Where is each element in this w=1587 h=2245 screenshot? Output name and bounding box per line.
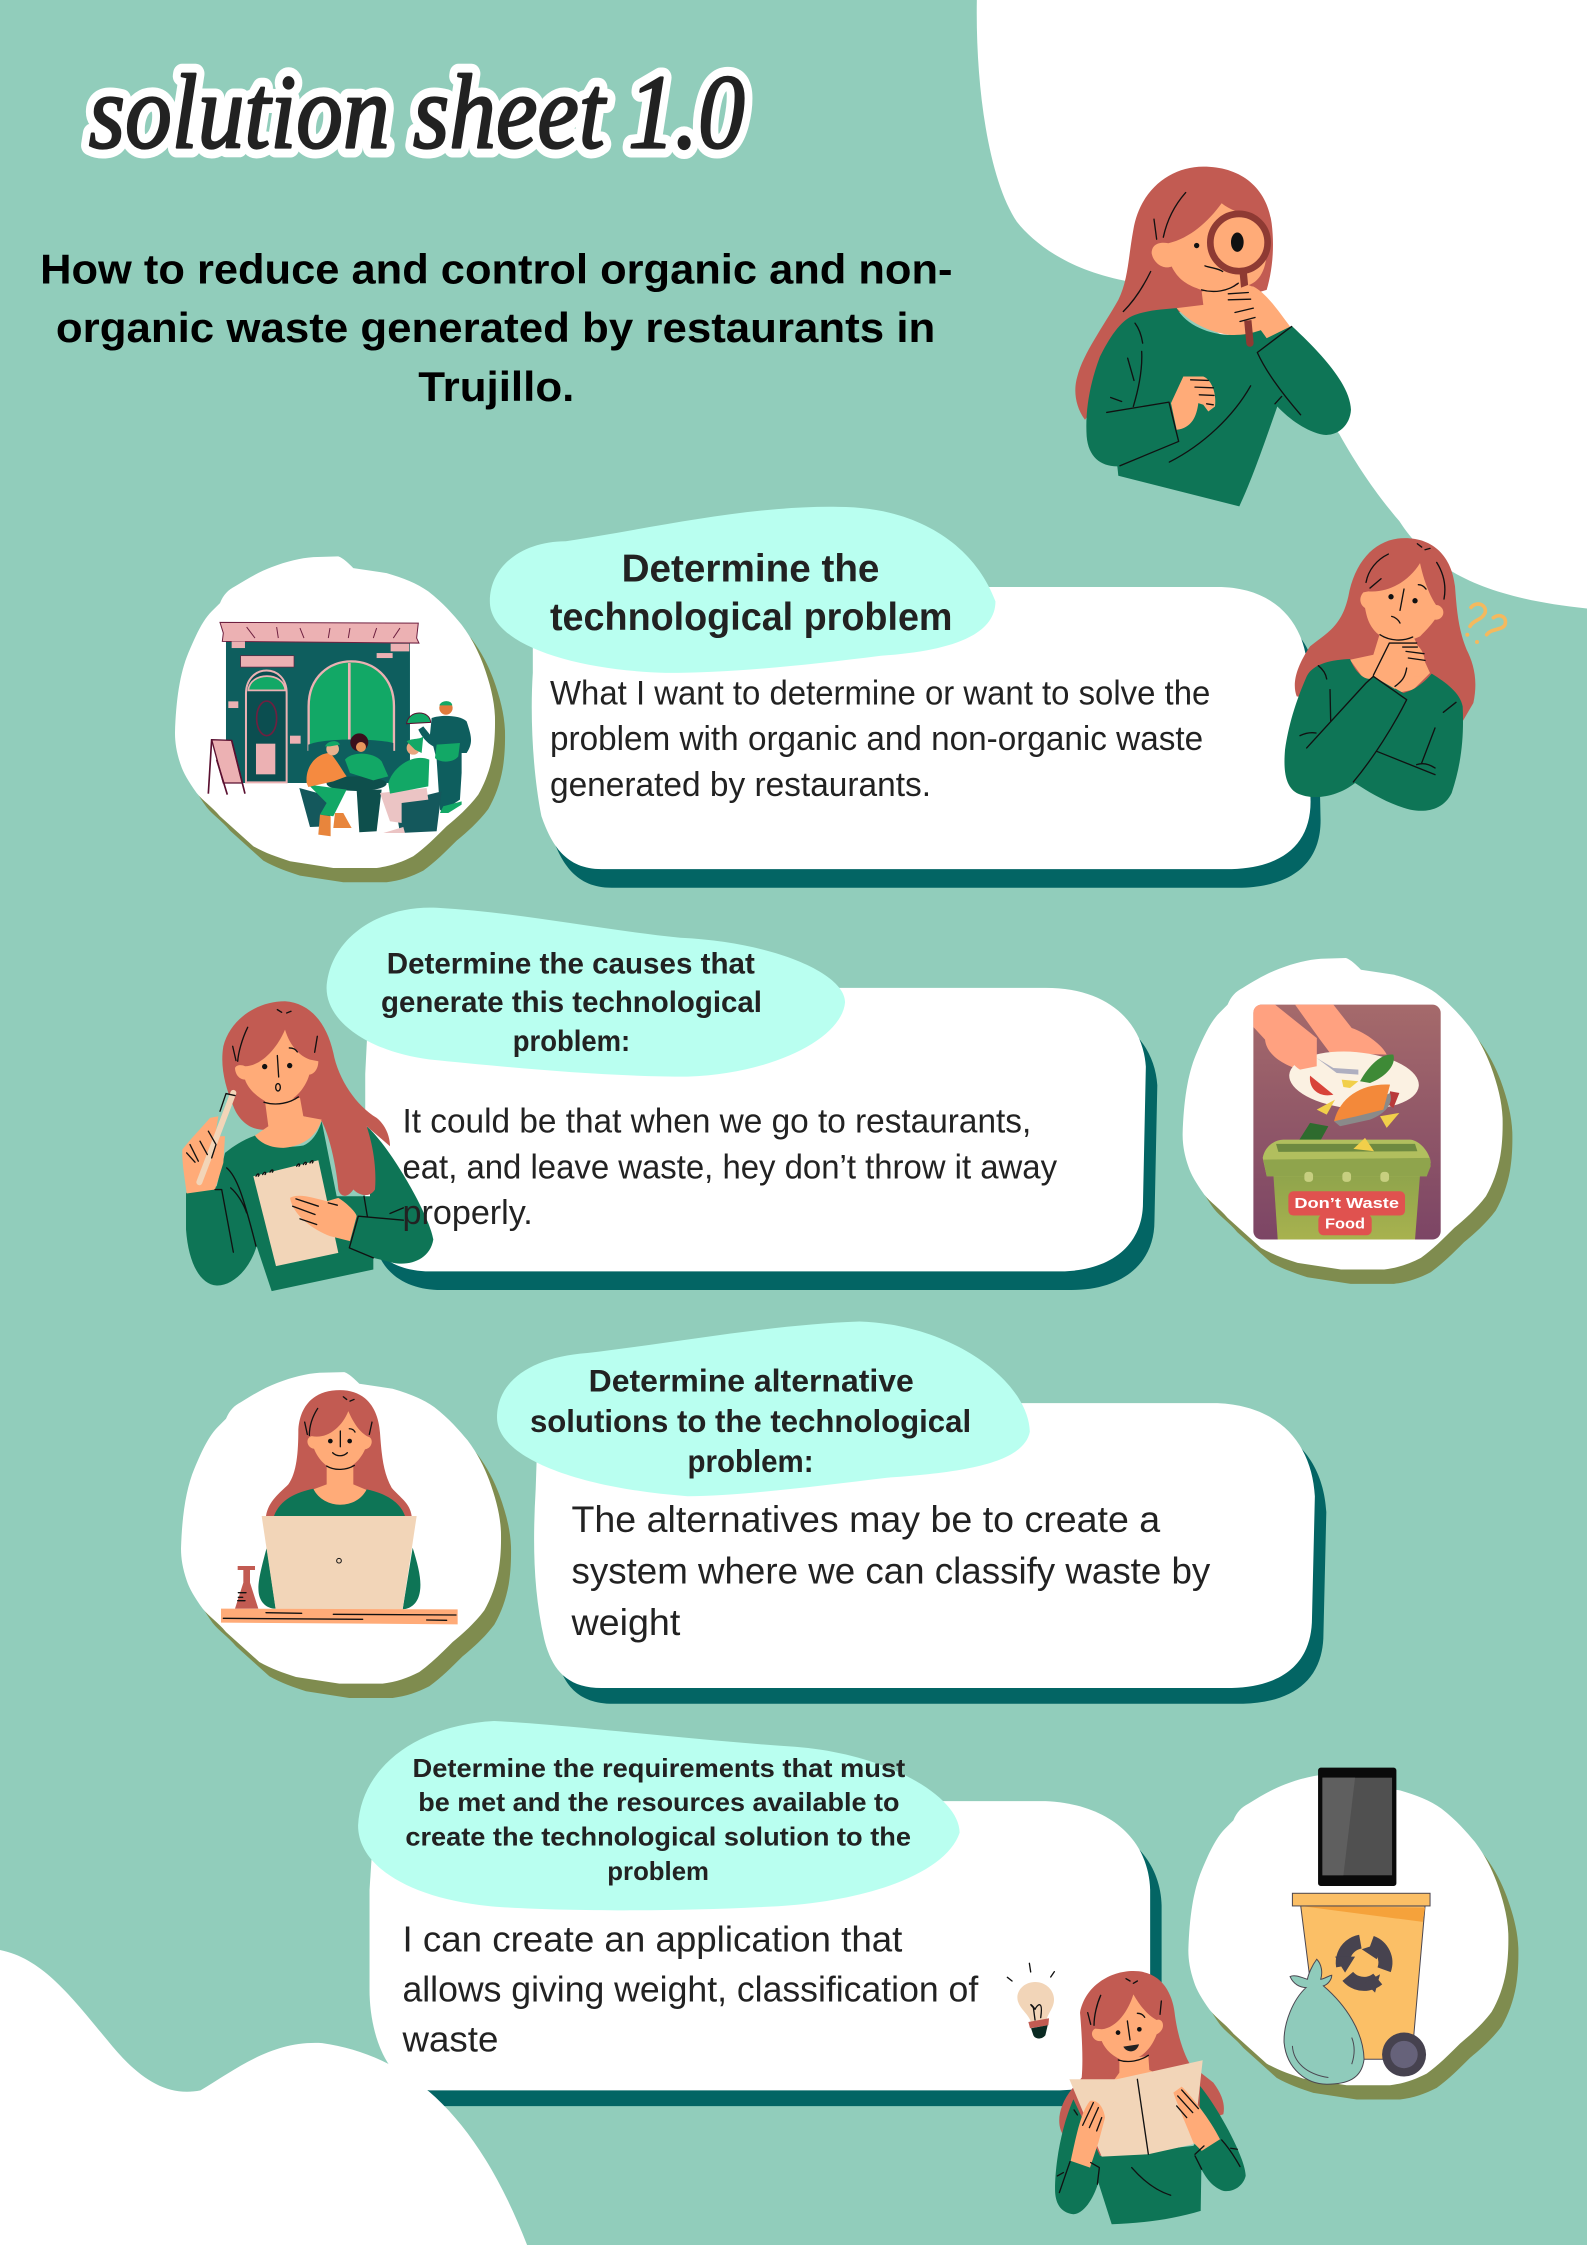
icon: don't waste food bin: Food — [1325, 1217, 1365, 1233]
panel: determine alternative solutions — [181, 1322, 1326, 1704]
card white — [532, 587, 1311, 869]
bubble text: problem — [607, 1858, 709, 1886]
body text — [402, 1103, 1058, 1232]
icon: recycling bin with bag — [1284, 1893, 1430, 2084]
heading question: How to reduce and control organic and non- — [40, 245, 952, 292]
heading question: organic waste generated by restaurants in — [56, 304, 935, 351]
body text: waste — [401, 2020, 498, 2060]
body text — [550, 674, 1210, 804]
bubble text: Determine the — [622, 547, 879, 590]
card shadow — [377, 1007, 1157, 1290]
icon: restaurant — [208, 622, 471, 836]
figure: woman at laptop — [221, 1390, 458, 1624]
title: solution sheet 1.0 — [89, 53, 745, 170]
body text: eat, and leave waste, hey don’t throw it away — [402, 1148, 1058, 1186]
bubble heading — [490, 507, 995, 673]
figure: woman reading paper — [1055, 1971, 1246, 2224]
body text: I can create an application that — [402, 1919, 902, 1959]
card shadow — [542, 606, 1321, 888]
card shadow — [381, 1817, 1162, 2106]
body text: generated by restaurants. — [550, 766, 931, 804]
body text: system where we can classify waste by — [571, 1550, 1211, 1592]
bubble text: Determine the causes that — [387, 948, 755, 981]
heading question: Trujillo. — [418, 363, 574, 410]
bubble text — [550, 547, 952, 639]
card white — [365, 988, 1146, 1271]
bubble text: generate this technological — [381, 986, 762, 1019]
body text: problem with organic and non-organic waste — [550, 720, 1203, 758]
card shadow — [546, 1419, 1326, 1704]
panel: determine the technological problem — [175, 507, 1321, 888]
bubble text — [530, 1363, 971, 1479]
circle white — [181, 1372, 501, 1684]
panel: determine the requirements — [0, 1721, 1518, 2245]
circle shadow olive — [191, 1386, 511, 1698]
bubble text: create the technological solution to the — [405, 1824, 911, 1852]
icon: don't waste food bin: Don’t Waste — [1294, 1196, 1399, 1212]
body text: The alternatives may be to create a — [571, 1498, 1160, 1540]
circle shadow olive — [1192, 972, 1512, 1284]
title: solution sheet 1.0 — [89, 53, 745, 170]
bubble text: problem: — [513, 1025, 630, 1058]
top right white blob — [977, 0, 1587, 608]
body text — [401, 1919, 978, 2060]
card white — [534, 1403, 1315, 1688]
circle white — [1188, 1774, 1508, 2085]
bubble text — [381, 948, 762, 1058]
body text: properly. — [402, 1194, 533, 1232]
bubble text — [405, 1755, 911, 1886]
body text: weight — [570, 1601, 681, 1643]
bubble heading — [497, 1322, 1030, 1496]
circle white — [175, 556, 495, 868]
bubble text: Determine the requirements that must — [413, 1755, 906, 1783]
body text — [570, 1498, 1211, 1643]
figure: thinking woman — [1284, 538, 1505, 811]
bubble text: problem: — [688, 1443, 814, 1479]
figure: woman with pencil and notepad — [182, 1001, 433, 1291]
bubble text: be met and the resources available to — [418, 1789, 899, 1817]
icon: don't waste food bin — [1253, 1005, 1441, 1240]
figure: woman with magnifying glass — [1075, 167, 1351, 506]
body text: What I want to determine or want to solve the — [550, 674, 1210, 712]
circle white — [1183, 958, 1503, 1270]
circle shadow olive — [1198, 1788, 1518, 2100]
icon: tablet — [1318, 1768, 1396, 1886]
bottom left white blob — [0, 1950, 527, 2245]
body text: It could be that when we go to restaurants, — [402, 1103, 1031, 1141]
panel: determine the causes — [182, 908, 1512, 1291]
body text: allows giving weight, classification of — [402, 1970, 978, 2010]
bubble text: solutions to the technological — [530, 1403, 971, 1439]
icon: light bulb — [1007, 1963, 1054, 2039]
bubble text: technological problem — [550, 596, 952, 639]
bubble heading — [358, 1721, 960, 1910]
bubble text: Determine alternative — [589, 1363, 914, 1399]
bubble heading — [327, 908, 845, 1077]
card white — [370, 1801, 1150, 2090]
heading question — [40, 245, 952, 410]
circle shadow olive — [185, 571, 505, 882]
